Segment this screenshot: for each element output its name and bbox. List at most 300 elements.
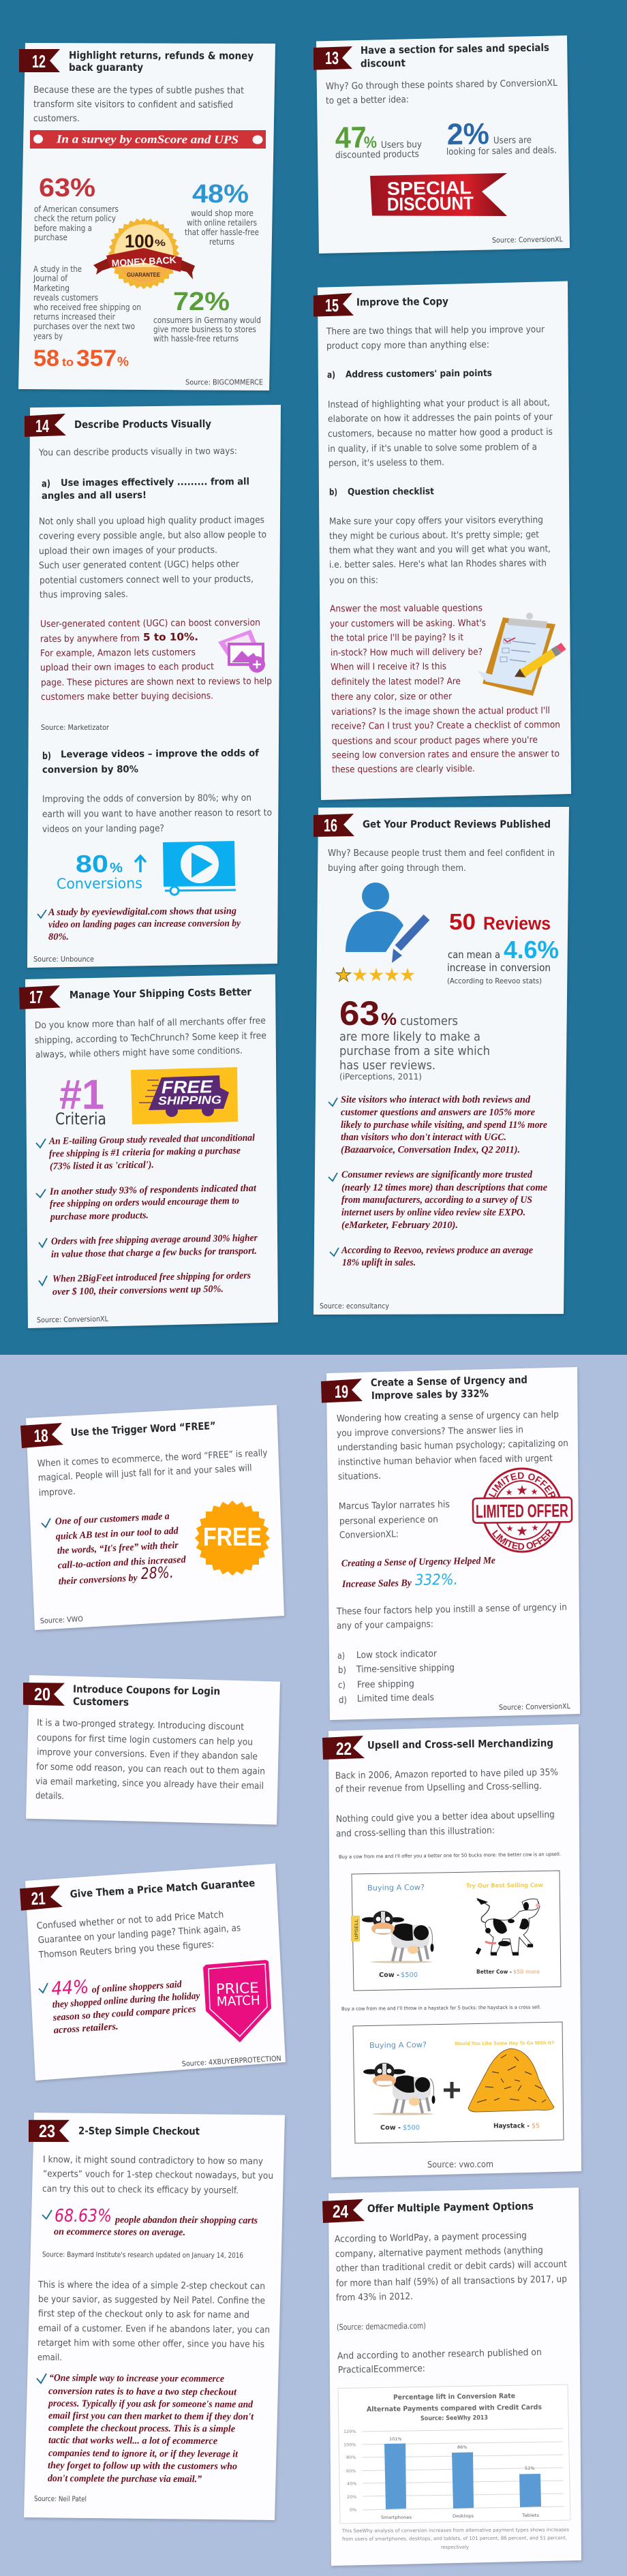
upsell illustration: $50 more <box>513 1969 540 1975</box>
panel 22 body <box>335 1767 558 1839</box>
panel 22 body: Nothing could give you a better idea about upselling <box>336 1809 555 1825</box>
panel 16 intro <box>328 848 555 874</box>
panel 14: describe products visually <box>25 405 281 968</box>
panel 23 intro: I know, it might sound contradictory to how so many <box>43 2154 263 2167</box>
Ian Rhodes quote: questions and scour product pages where you're <box>332 735 538 747</box>
panel 21 intro: Guarantee on your landing page? Think again, as <box>37 1922 241 1946</box>
panel 21 card <box>25 1864 286 2081</box>
panel 18 intro: When it comes to ecommerce, the word “FREE” is really <box>37 1447 268 1469</box>
stat 48 percent <box>185 180 259 247</box>
panel 23 number ribbon <box>29 2120 70 2142</box>
stat 80 percent conversions: % <box>110 861 123 876</box>
pain points paragraph: person, it's useless to them. <box>328 457 444 469</box>
Marcus Taylor text <box>339 1499 450 1541</box>
bar chart: percentage lift in conversion rate: Alternate Payments compared with Credit Cards <box>367 2404 542 2413</box>
source Marketizator: Source: Marketizator <box>41 724 110 732</box>
four factors list <box>337 1649 455 1706</box>
stat 47 percent <box>335 121 422 161</box>
panel 24: payment options <box>322 2188 581 2566</box>
bullet: 2BigFeet: When 2BigFeet introduced free shipping for orders <box>52 1270 251 1285</box>
survey banner: In a survey by comScore and UPS <box>56 132 239 146</box>
Neil Patel quote: complete the checkout process. This is a simple <box>48 2423 236 2434</box>
stat 47 percent: discounted products <box>335 149 419 161</box>
two step paragraph: be your savior, as suggested by Neil Patel. Confine the <box>38 2294 265 2306</box>
bullet: site visitors: customer questions and answers are 105% more <box>341 1107 536 1118</box>
chart caption: from users of smartphones, desktops, and tablets, of 101 percent, 86 percent, and 51 percent, <box>342 2535 567 2542</box>
panel 20 body: It is a two-pronged strategy. Introducing discount <box>37 1717 244 1732</box>
bullet: 68.63 percent: people abandon their shopping carts <box>114 2214 258 2226</box>
subheading b: b) <box>42 751 51 762</box>
bullet: E-tailing study: (73% listed it as 'critical'). <box>50 1159 154 1172</box>
panel 14 number ribbon: 14 <box>35 416 49 436</box>
bullet: E-tailing study: An E-tailing Group study revealed that unconditional <box>48 1133 255 1147</box>
bar chart: percentage lift in conversion rate: Source: SeeWhy 2013 <box>420 2414 488 2422</box>
panel 17 number ribbon <box>19 985 61 1009</box>
Ian Rhodes quote: there any color, size or other <box>331 691 452 703</box>
panel 19 number ribbon <box>321 1379 363 1402</box>
eyeview study bullet: video on landing pages can increase conversion by <box>48 918 241 930</box>
four factors list: b) <box>338 1665 346 1676</box>
cross sell illustration: Would You Like Some Hay To Go With It? <box>455 2040 554 2046</box>
limited offer stamp <box>472 1468 572 1552</box>
icon: haystack <box>468 2049 554 2112</box>
bullet: consumer reviews <box>328 1169 548 1231</box>
panel 19 card <box>326 1367 580 1720</box>
panel 20 heading: Introduce Coupons for Login <box>73 1683 220 1698</box>
stat 72 percent: with hassle-free returns <box>153 334 239 343</box>
panel 19 heading: Improve sales by 332% <box>371 1387 489 1402</box>
stat 72 percent: 72% <box>173 288 230 316</box>
Ian Rhodes quote: Answer the most valuable questions <box>330 602 483 615</box>
price match shield: PRICE <box>215 1980 259 1997</box>
journal study text: returns increased their <box>33 312 115 322</box>
Ian Rhodes quote <box>330 602 560 775</box>
panel 22 card <box>328 1724 581 2177</box>
panel 20 card <box>26 1675 280 1825</box>
panel 17 heading: Manage Your Shipping Costs Better <box>70 985 252 1001</box>
panel 14 heading: Describe Products Visually <box>74 418 211 431</box>
stat 48 percent: with online retailers <box>187 218 257 228</box>
subheading b: b) <box>329 487 337 497</box>
panel 16 intro: Why? Because people trust them and feel confident in <box>328 848 555 859</box>
panel 19 intro: Wondering how creating a sense of urgency can help <box>337 1409 559 1424</box>
panel 20 body: details. <box>35 1790 64 1802</box>
stat 50 reviews: 4.6% <box>504 936 559 964</box>
videos paragraph: earth will you want to have another reason to resort to <box>42 808 272 820</box>
upsell illustration: Buying A Cow? <box>367 1883 425 1892</box>
panel 24 number ribbon: 24 <box>333 2201 348 2222</box>
panel 23 card <box>24 2113 285 2520</box>
stat 50 reviews: can mean a <box>448 949 500 961</box>
bar chart: percentage lift in conversion rate: 60% <box>346 2468 356 2474</box>
panel 24 body: from 43% in 2012. <box>336 2291 413 2303</box>
subheading a <box>42 476 249 502</box>
upsell illustration: $500 <box>401 1972 418 1979</box>
panel 15 number ribbon <box>314 293 354 317</box>
stat 72 percent <box>153 288 261 343</box>
panel 22 body: of their revenue from Upselling and Cross-selling. <box>335 1781 542 1795</box>
bar chart: percentage lift in conversion rate: 86% <box>457 2444 467 2450</box>
stat 2 percent: looking for sales and deals. <box>446 145 557 157</box>
panel 24 body: for more than half (59%) of all transactions by 2017, up <box>336 2273 567 2289</box>
panel 22 number ribbon <box>322 1736 365 1760</box>
cross sell illustration: Haystack - <box>493 2122 530 2130</box>
icon: cow side view <box>476 1898 540 1954</box>
panel 24 number ribbon <box>322 2199 365 2223</box>
Ian Rhodes quote: the total price I'll be paying? Is it <box>331 632 463 643</box>
bullet: 93 percent: In another study 93% of respondents indicated that <box>49 1183 257 1197</box>
four factors list: Free shipping <box>357 1678 414 1690</box>
subheading b: Leverage videos – improve the odds of <box>61 748 260 760</box>
panel 19 heading <box>371 1374 527 1402</box>
stat 63 percent: of American consumers <box>34 204 119 214</box>
panel 16 intro: buying after going through them. <box>328 863 466 874</box>
panel 19 intro <box>337 1409 568 1482</box>
stat 63 percent customers: 63 <box>339 994 380 1032</box>
panel 23 heading: 2-Step Simple Checkout <box>78 2125 200 2137</box>
stat 2 percent <box>446 117 557 157</box>
stat 63 percent customers: are more likely to make a <box>339 1030 480 1044</box>
cross sell illustration: Buying A Cow? <box>369 2040 427 2050</box>
journal study text <box>33 264 141 341</box>
stat 63 percent: 63% <box>39 174 95 202</box>
Ian Rhodes quote: receive? Can I trust you? Create a checklist of common <box>331 720 560 732</box>
Ian Rhodes quote: definitely the latest model? Are <box>331 676 461 688</box>
panel 12 number ribbon: 12 <box>32 51 46 72</box>
two step paragraph <box>37 2280 270 2363</box>
checklist paragraph: they might be curious about. It's pretty simple; get <box>329 530 539 542</box>
bullet: 68.63 percent <box>42 2206 258 2238</box>
two step paragraph: retarget him with some other offer, since you have his <box>37 2337 264 2350</box>
subheading a: a) <box>327 369 335 380</box>
bullet: consumer reviews: from manufacturers, according to a survey of US <box>341 1195 532 1206</box>
eyeview study bullet <box>37 906 241 942</box>
Ian Rhodes quote: seeing low conversion rates and ensure the answer to <box>332 748 560 761</box>
Neil Patel quote: don't complete the purchase via email.” <box>48 2473 202 2485</box>
panel 21 intro <box>36 1910 241 1961</box>
panel 22 heading: Upsell and Cross-sell Merchandizing <box>367 1737 553 1751</box>
subheading a: Use images effectively ......... from all <box>61 476 249 489</box>
stat 63 percent customers <box>339 994 490 1082</box>
panel 22 source: Source: vwo.com <box>427 2160 493 2171</box>
money back guarantee badge: MONEY BACK <box>111 254 177 269</box>
stat 72 percent: give more business to stores <box>153 324 256 334</box>
stat 72 percent: consumers in Germany would <box>153 316 261 325</box>
bullet: Reevoo uplift: 18% uplift in sales. <box>342 1257 416 1268</box>
panel 20 number ribbon: 20 <box>34 1684 50 1704</box>
four factors list: a) <box>337 1651 345 1661</box>
panel 19 intro: instinctive human behavior when faced with urgent <box>338 1453 553 1468</box>
stat 63 percent customers: purchase from a site which <box>339 1044 490 1058</box>
panel 17 intro: always, while others might have some conditions. <box>35 1045 243 1060</box>
panel 12 intro text: Because these are the types of subtle pushes that <box>33 85 244 96</box>
panel 17: shipping costs <box>19 975 278 1328</box>
practical ecommerce text <box>337 2347 542 2376</box>
panel 13 number ribbon: 13 <box>325 48 339 68</box>
four factors intro: These four factors help you instill a sense of urgency in <box>336 1602 567 1617</box>
two step paragraph: email. <box>37 2352 62 2363</box>
panel 13 heading: Have a section for sales and specials <box>361 42 549 57</box>
bullet: 44 percent: of online shoppers said <box>91 1979 183 1995</box>
bar chart: percentage lift in conversion rate: 100% <box>343 2442 356 2448</box>
panel 12 source: Source: BIGCOMMERCE <box>185 379 263 387</box>
stat 63 percent: purchase <box>34 233 67 243</box>
panel 20 body: coupons for first time login customers can help you <box>37 1732 253 1748</box>
panel 15 intro text: product copy more than anything else: <box>326 339 489 352</box>
four factors list: Limited time deals <box>357 1692 434 1704</box>
bullet: site visitors: than visitors who don't interact with UGC. <box>341 1132 506 1143</box>
images paragraph: Such user generated content (UGC) helps other <box>39 559 239 571</box>
panel 13 card <box>316 35 570 254</box>
bullet: Reevoo uplift <box>330 1245 534 1268</box>
background: light blue lower section <box>0 1355 627 2576</box>
panel 15 intro text <box>326 324 545 352</box>
panel 21 source: Source: 4XBUYERPROTECTION <box>181 2055 281 2068</box>
panel 20 body: for some odd reason, you can reach out to them again <box>36 1762 265 1777</box>
bullet: site visitors: (Bazaarvoice, Conversation Index, Q2 2011). <box>341 1145 520 1156</box>
bar chart: percentage lift in conversion rate: 0% <box>350 2507 356 2513</box>
free shipping truck badge: SHIPPING <box>158 1093 221 1107</box>
bullet: site visitors: Site visitors who interact with both reviews and <box>341 1094 531 1105</box>
panel 12 card <box>18 43 275 390</box>
urgency quote: Increase Sales By <box>341 1578 412 1590</box>
subheading a: Address customers' pain points <box>346 368 492 380</box>
cross sell illustration: $500 <box>403 2124 420 2132</box>
journal study text: A study in the <box>33 264 82 274</box>
panel 17 source: Source: ConversionXL <box>37 1315 108 1324</box>
panel 23 intro: can try this out to check its efficacy by yourself. <box>42 2183 239 2196</box>
bullet: 68.63 percent: 68.63% <box>55 2206 112 2226</box>
panel 15: improve the copy <box>314 281 571 800</box>
upsell caption: Buy a cow from me and I'll offer you a better one for 50 bucks more: the better cow is an upsell. <box>339 1852 561 1860</box>
panel 23 intro <box>42 2154 273 2196</box>
special discount ribbon: DISCOUNT <box>387 193 474 215</box>
journal study text: purchases over the next two <box>33 322 135 331</box>
panel 24 card <box>328 2188 581 2566</box>
Ian Rhodes quote: in-stock? How much will delivery be? <box>331 647 483 658</box>
upsell illustration <box>351 1871 561 1991</box>
panel 14 intro: You can describe products visually in two ways: <box>38 446 237 459</box>
stat 50 reviews <box>447 909 559 985</box>
pain points paragraph: elaborate on how it addresses the pain points of your <box>328 412 553 425</box>
Neil Patel quote: conversion rates is to have a two step checkout <box>48 2386 237 2397</box>
panel 24 body <box>335 2230 567 2303</box>
four factors list: d) <box>339 1695 347 1706</box>
special discount ribbon <box>370 173 507 216</box>
two step paragraph: This is where the idea of a simple 2-step checkout can <box>37 2280 265 2292</box>
icon: video player <box>163 841 236 895</box>
panel 20 body <box>35 1717 265 1802</box>
panel 18 heading: Use the Trigger Word “FREE” <box>70 1420 216 1439</box>
checklist paragraph: i.e. better sales. Here's what Ian Rhodes shares with <box>329 557 547 570</box>
stat 80 percent conversions <box>57 850 146 892</box>
bar chart: percentage lift in conversion rate: 101% <box>389 2436 402 2442</box>
bullet: Reevoo uplift: According to Reevoo, reviews produce an average <box>341 1245 534 1256</box>
four factors intro: any of your campaigns: <box>337 1619 433 1631</box>
panel 15 heading: Improve the Copy <box>356 295 448 308</box>
quote bullet with 28 percent: 28%. <box>140 1564 174 1583</box>
checklist paragraph <box>329 515 551 586</box>
panel 21 heading: Give Them a Price Match Guarantee <box>70 1877 256 1901</box>
bullet: 93 percent: purchase more products. <box>49 1210 149 1223</box>
panel 24 body: company, alternative payment methods (anything <box>335 2245 543 2260</box>
panel 14 number ribbon <box>25 414 66 437</box>
panel 12 intro text: transform site visitors to confident and satisfied <box>33 99 233 110</box>
panel 16: product reviews <box>314 807 569 1315</box>
bullet: 2BigFeet <box>39 1270 251 1298</box>
subheading b: conversion by 80% <box>42 764 138 776</box>
checklist paragraph: you on this: <box>329 574 378 586</box>
subheading b: Question checklist <box>348 486 435 497</box>
free shipping truck badge <box>131 1067 238 1124</box>
stat 50 reviews: increase in conversion <box>447 962 551 974</box>
practical ecommerce text: And according to another research published on <box>337 2347 542 2362</box>
quote bullet with 28 percent <box>42 1511 187 1587</box>
panel 19 source: Source: ConversionXL <box>499 1702 570 1712</box>
stat 48 percent: would shop more <box>191 209 254 218</box>
eyeview study bullet: A study by eyeviewdigital.com shows that using <box>48 906 236 918</box>
Neil Patel quote: tactic that works well... a lot of ecommerce <box>48 2435 218 2447</box>
journal study text: Marketing <box>33 283 70 293</box>
Baymard source: Source: Baymard Institute's research updated on January 14, 2016 <box>42 2251 243 2260</box>
four factors intro <box>336 1602 567 1631</box>
number one criteria: #1 <box>59 1071 104 1118</box>
subheading b <box>42 748 260 776</box>
panel 12 intro text <box>33 85 244 124</box>
panel 21: price match <box>20 1864 286 2081</box>
pain points paragraph: customers, because no matter how good a product is <box>328 427 553 440</box>
panel 22: upsell and cross-sell <box>322 1724 581 2177</box>
pain points paragraph: in quality, if it's unable to solve some problem of a <box>328 442 537 455</box>
panel 16 card <box>314 807 569 1315</box>
stat 48 percent: returns <box>209 237 234 247</box>
panel 23: two step checkout <box>24 2113 285 2520</box>
upsell illustration: Cow - <box>379 1972 399 1979</box>
stat 63 percent: check the return policy <box>34 214 116 224</box>
panel 13 heading <box>361 42 549 70</box>
images paragraph: potential customers connect well to your products, <box>40 574 254 586</box>
upsell illustration: Better Cow - <box>476 1969 512 1975</box>
bar chart: percentage lift in conversion rate: 51% <box>525 2466 534 2471</box>
checklist paragraph: Make sure your copy offers your visitors everything <box>329 515 543 527</box>
four factors list: Low stock indicator <box>356 1649 437 1661</box>
bullet: 44 percent: 44% <box>51 1976 89 1999</box>
survey banner <box>30 130 266 149</box>
practical ecommerce text: PracticalEcommerce: <box>338 2363 425 2376</box>
bullet: E-tailing study: free shipping is #1 criteria for making a purchase <box>49 1146 241 1159</box>
Ian Rhodes quote: these questions are clearly visible. <box>332 763 475 775</box>
Neil Patel quote: companies tend to ignore it, or if they leverage it <box>48 2448 239 2459</box>
videos paragraph: videos on your landing page? <box>42 823 164 835</box>
panel 17 intro <box>35 1015 266 1060</box>
panel 18 intro: improve. <box>38 1486 76 1499</box>
panel 20 body: improve your conversions. Even if they abandon sale <box>37 1747 258 1762</box>
icon: reviewer with pen and stars <box>337 883 427 981</box>
number one criteria: Criteria <box>55 1109 106 1129</box>
stat 48 percent: that offer hassle-free <box>185 228 259 237</box>
money back guarantee badge: 100 <box>125 231 154 251</box>
two step paragraph: first step of the checkout only to ask for name and <box>38 2308 249 2320</box>
Ian Rhodes quote: variations? Is the image shown the actual product I'll <box>331 705 550 718</box>
panel 12: returns and money back <box>18 43 275 390</box>
urgency quote <box>341 1555 496 1590</box>
panel 12 number ribbon <box>19 49 60 72</box>
panel 15 number ribbon: 15 <box>325 295 339 316</box>
stat 47 percent: 47 <box>335 121 367 155</box>
panel 23 intro: “experts” vouch for 1-step checkout nowadays, but you <box>43 2168 273 2181</box>
panel 16 heading: Get Your Product Reviews Published <box>363 818 551 830</box>
money back guarantee badge: GUARANTEE <box>127 272 161 278</box>
panel 13 source: Source: ConversionXL <box>492 235 563 245</box>
Marcus Taylor text: personal experience on <box>339 1514 438 1527</box>
free shipping truck badge: FREE <box>162 1076 213 1097</box>
Ian Rhodes quote: When will I receive it? Is this <box>331 661 446 673</box>
UGC callout text: page. These pictures are shown next to reviews to help <box>41 676 272 688</box>
panel 22 body: and cross-selling than this illustration: <box>336 1825 495 1839</box>
panel 16 source: Source: econsultancy <box>320 1302 389 1310</box>
cross sell caption: Buy a cow from me and I'll throw in a haystack for 5 bucks: the haystack is a cross sell. <box>341 2004 541 2012</box>
panel 17 card <box>25 975 278 1328</box>
bullet: site visitors: likely to purchase while visiting, and spend 11% more <box>341 1120 548 1131</box>
bar chart: percentage lift in conversion rate: 40% <box>347 2481 356 2486</box>
subheading a: angles and all users! <box>42 490 147 502</box>
panel 24 body: According to WorldPay, a payment processing <box>335 2230 527 2245</box>
panel 15 card <box>318 281 571 800</box>
four factors list: Time-sensitive shipping <box>356 1662 455 1675</box>
pain points paragraph: Instead of highlighting what your product is all about, <box>328 397 550 410</box>
quote bullet with 28 percent: their conversions by <box>58 1573 138 1587</box>
stat 50 reviews: (According to Reevoo stats) <box>447 977 542 985</box>
panel 18 intro <box>37 1447 268 1499</box>
Neil Patel quote: email first you can then market to them if they don't <box>48 2410 254 2423</box>
panel 20: coupons <box>23 1675 280 1825</box>
bullet: 44 percent: season so they could compare prices <box>52 2004 196 2023</box>
limited offer stamp: LIMITED OFFER <box>492 1529 553 1550</box>
images paragraph: covering every possible angle, but also allow people to <box>39 530 266 542</box>
stat 63 percent: before making a <box>34 224 92 233</box>
bullet: E-tailing study <box>36 1133 255 1172</box>
pain points paragraph <box>328 397 553 469</box>
panel 12 heading <box>69 49 254 74</box>
panel 19 heading: Create a Sense of Urgency and <box>371 1374 527 1389</box>
UGC callout text: customers make better buying decisions. <box>41 690 213 703</box>
quote bullet with 28 percent: the words, “It's free” with their <box>57 1540 179 1557</box>
panel 21 intro: Thomson Reuters bring you these figures: <box>37 1939 215 1961</box>
bar chart: percentage lift in conversion rate: Desktops <box>453 2513 474 2519</box>
UGC callout text: 5 to 10%. <box>143 630 198 643</box>
panel 18 intro: magical. People will just fall for it and your sales will <box>37 1462 252 1484</box>
bar chart: percentage lift in conversion rate: Tablets <box>521 2513 540 2518</box>
price match shield <box>203 1960 271 2042</box>
Ian Rhodes quote: your customers will be asking. What's <box>330 617 486 630</box>
stat 63 percent customers: % <box>381 1010 397 1029</box>
chart caption: respectively <box>441 2545 469 2550</box>
panel 13 intro text <box>326 78 557 106</box>
bar chart: percentage lift in conversion rate: Percentage lift in Conversion Rate <box>393 2393 515 2402</box>
panel 16 number ribbon <box>314 814 354 837</box>
bullet: 30 percent higher: Orders with free shipping average around 30% higher <box>51 1233 258 1247</box>
Neil Patel quote: “One simple way to increase your ecommerce <box>49 2373 225 2385</box>
stat 80 percent conversions: 80 <box>76 850 108 878</box>
quote bullet with 28 percent: quick AB test in our tool to add <box>55 1526 179 1542</box>
upsell illustration: UPSELL <box>354 1918 359 1939</box>
panel 12 heading: back guaranty <box>69 61 143 74</box>
eyeview study bullet: 80%. <box>48 932 69 942</box>
money back guarantee badge: % <box>155 237 166 248</box>
panel 24 body: other than traditional credit or debit cards) will account <box>336 2258 567 2274</box>
panel 24 heading: Offer Multiple Payment Options <box>367 2200 534 2215</box>
images paragraph: upload their own images of your products. <box>39 545 217 557</box>
